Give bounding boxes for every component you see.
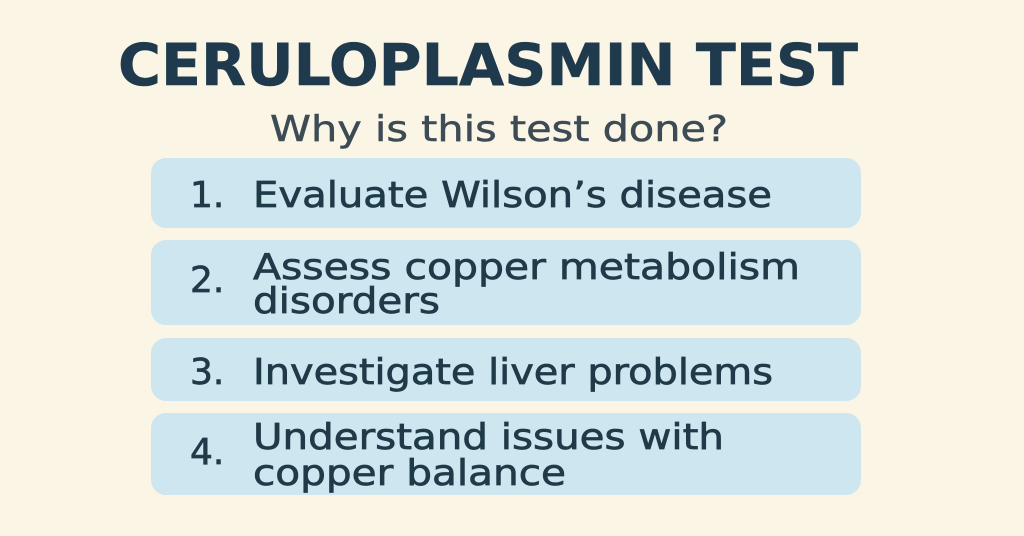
- item 1: 1.: [190, 175, 224, 216]
- title: CERULOPLASMIN TEST: [118, 31, 858, 99]
- item 3: [151, 338, 861, 401]
- item 2: Assess copper metabolism: [253, 247, 800, 288]
- item 3: Investigate liver problems: [253, 352, 773, 393]
- item 4: copper balance: [253, 453, 566, 494]
- item 2: [151, 240, 861, 325]
- item 4: [151, 413, 861, 495]
- item 2: 2.: [190, 260, 224, 301]
- item 3: 3.: [190, 352, 224, 393]
- subtitle: Why is this test done?: [270, 109, 728, 150]
- item 1: [151, 158, 861, 228]
- item 4: Understand issues with: [253, 417, 724, 458]
- item 2: disorders: [253, 281, 440, 322]
- item 4: 4.: [190, 432, 224, 473]
- item 1: Evaluate Wilson’s disease: [253, 175, 772, 216]
